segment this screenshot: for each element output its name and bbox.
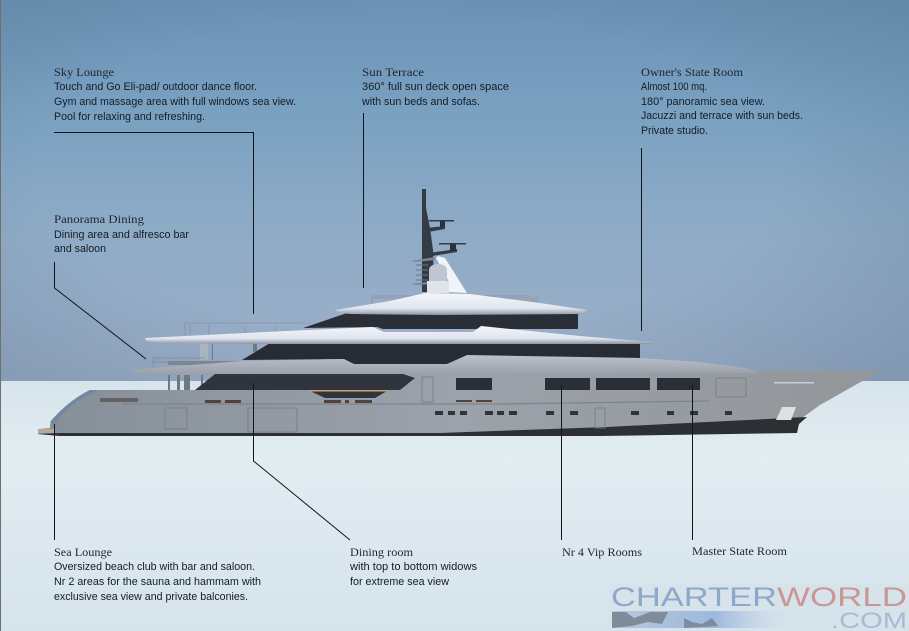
text: Dining room: Dining room [350, 545, 414, 559]
text: Panorama Dining: Dining area and alfresco bar [54, 229, 189, 241]
sky background [0, 0, 909, 381]
sky vignette [0, 0, 909, 381]
text: Sea Lounge: Nr 2 areas for the sauna and hammam with [54, 576, 261, 588]
stern highlight [50, 390, 98, 425]
text: Sun Terrace: with sun beds and sofas. [361, 96, 480, 108]
text: Sun Terrace [361, 65, 509, 108]
mast and radar [411, 189, 467, 293]
swim platform [38, 429, 54, 433]
second deck roof [145, 326, 655, 344]
logo map landmasses [612, 612, 718, 628]
main windows [456, 378, 700, 390]
main deck rub line [122, 401, 709, 404]
pillars [168, 343, 257, 391]
sea background [0, 381, 909, 631]
text: Panorama Dining: and saloon [54, 243, 106, 255]
main superstructure slab [132, 355, 755, 376]
CharterWorld logo: CHARTER [611, 582, 777, 612]
upper dark glazing [242, 343, 640, 364]
top deck roof [335, 293, 587, 315]
text: Master State Room: Master State Room [692, 544, 788, 558]
text: Owner's State Room: Jacuzzi and terrace with sun beds. [641, 110, 803, 122]
text: Nr 4 Vip Rooms: Nr 4 Vip Rooms [562, 545, 642, 559]
CharterWorld logo: WORLD [777, 582, 907, 612]
leader line: Panorama Dining [54, 262, 146, 359]
text: Sea Lounge: Sea Lounge [54, 545, 112, 559]
text: Dining room: for extreme sea view [350, 576, 449, 588]
CharterWorld logo [609, 582, 909, 631]
text: Owner's State Room: Private studio. [641, 125, 708, 137]
text: Sea Lounge [54, 545, 261, 603]
leader line: Master State Room [692, 385, 694, 540]
text: Sun Terrace: Sun Terrace [362, 65, 424, 79]
text: Panorama Dining [54, 212, 189, 255]
text: Panorama Dining: Panorama Dining [54, 212, 144, 226]
lounge recess with orange trim [310, 391, 387, 398]
panorama deck rail [153, 358, 205, 367]
hull [38, 370, 880, 436]
text: Sky Lounge: Sky Lounge [54, 65, 114, 79]
yacht illustration [38, 189, 880, 436]
second deck railing [185, 323, 310, 335]
bow anchor plate [776, 407, 796, 420]
text: Dining room: with top to bottom widows [349, 561, 477, 573]
text: Owner's State Room: Owner's State Room [641, 65, 744, 79]
leader line: Nr 4 Vip Rooms [560, 385, 562, 540]
leader line: Sky Lounge [54, 132, 254, 314]
lower dark glazing [195, 374, 415, 390]
text: Owner's State Room [641, 65, 803, 137]
top deck dark glazing [303, 312, 578, 329]
text: Sun Terrace: 360° full sun deck open space [362, 81, 509, 93]
text: Sky Lounge: Touch and Go Eli-pad/ outdoor dance floor. [54, 81, 257, 93]
text: Sea Lounge: Oversized beach club with bar and saloon. [54, 561, 255, 573]
leader line: Dining room [254, 383, 350, 540]
brown slots [100, 398, 492, 403]
keel [38, 417, 807, 436]
text: Sky Lounge [54, 65, 296, 123]
hull panels [165, 377, 746, 432]
text: Dining room [349, 545, 477, 588]
text: Sea Lounge: exclusive sea view and private balconies. [54, 591, 248, 603]
text: Owner's State Room: Almost 100 mq. [641, 81, 707, 93]
leader line: Owner's State Room [640, 148, 642, 331]
text: Owner's State Room: 180° panoramic sea view. [641, 96, 765, 108]
leader line: Sea Lounge [54, 424, 56, 540]
text: Sky Lounge: Pool for relaxing and refreshing. [54, 111, 205, 123]
text: Sky Lounge: Gym and massage area with full windows sea view. [54, 96, 296, 108]
lower portholes [435, 411, 732, 415]
leader line: Sun Terrace [362, 113, 364, 288]
top deck railing [372, 296, 530, 304]
left page edge [0, 0, 1, 631]
logo map bar [612, 611, 800, 628]
bow name mark [774, 382, 814, 384]
